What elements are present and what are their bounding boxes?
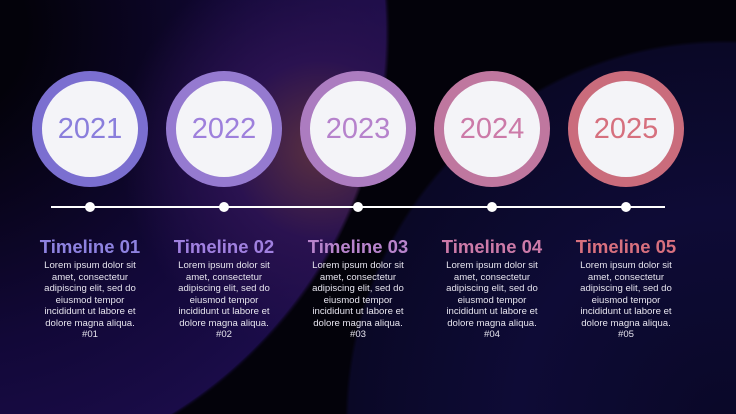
text 03: incididunt ut labore et xyxy=(312,306,404,317)
text 05: Timeline 05 xyxy=(576,236,676,257)
circle 2024 xyxy=(434,71,550,187)
circle 2021: 2021 xyxy=(58,113,122,145)
circle 2025 xyxy=(568,71,684,187)
text 01: dolore magna aliqua. xyxy=(45,318,135,328)
text 03 xyxy=(308,236,408,340)
text 01: amet, consectetur xyxy=(52,272,128,282)
text 02: eiusmod tempor xyxy=(190,294,258,306)
text 05: eiusmod tempor xyxy=(592,294,660,306)
text 03: Timeline 03 xyxy=(308,236,408,257)
text 03: Lorem ipsum dolor sit xyxy=(312,260,404,271)
text 05: adipiscing elit, sed do xyxy=(580,283,672,294)
circle 2021 xyxy=(32,71,148,187)
text 03: adipiscing elit, sed do xyxy=(312,283,404,294)
text 02: amet, consectetur xyxy=(186,272,262,282)
text 03: #03 xyxy=(350,329,366,340)
text 04: Lorem ipsum dolor sit xyxy=(446,260,538,271)
text 05 xyxy=(576,236,676,340)
text 05: #05 xyxy=(618,329,634,340)
text 02: dolore magna aliqua. xyxy=(179,318,269,328)
text 01: Timeline 01 xyxy=(40,236,140,257)
text 01: Lorem ipsum dolor sit xyxy=(44,260,136,271)
circle 2022: 2022 xyxy=(192,113,256,145)
text 04 xyxy=(442,236,542,340)
text 02: #02 xyxy=(216,329,232,340)
text 03: eiusmod tempor xyxy=(324,294,392,306)
text 02 xyxy=(174,236,274,340)
timeline line xyxy=(51,206,665,208)
circle 2025: 2025 xyxy=(594,113,658,145)
text 01: #01 xyxy=(82,329,98,340)
text 04: adipiscing elit, sed do xyxy=(446,283,538,294)
text 03: dolore magna aliqua. xyxy=(313,318,403,328)
text 01: incididunt ut labore et xyxy=(44,306,136,317)
circle 2022 xyxy=(166,71,282,187)
text 02: incididunt ut labore et xyxy=(178,306,270,317)
text 03: amet, consectetur xyxy=(320,272,396,282)
text 04: #04 xyxy=(484,329,500,340)
text 04: Timeline 04 xyxy=(442,236,542,257)
text 01: eiusmod tempor xyxy=(56,294,124,306)
text 05: dolore magna aliqua. xyxy=(581,318,671,328)
text 02: Lorem ipsum dolor sit xyxy=(178,260,270,271)
circle 2024: 2024 xyxy=(460,113,524,145)
text 01 xyxy=(40,236,140,340)
text 05: incididunt ut labore et xyxy=(580,306,672,317)
text 02: Timeline 02 xyxy=(174,236,274,257)
text 02: adipiscing elit, sed do xyxy=(178,283,270,294)
text 04: amet, consectetur xyxy=(454,272,530,282)
text 04: dolore magna aliqua. xyxy=(447,318,537,328)
circle 2023 xyxy=(300,71,416,187)
text 05: Lorem ipsum dolor sit xyxy=(580,260,672,271)
text 05: amet, consectetur xyxy=(588,272,664,282)
text 04: incididunt ut labore et xyxy=(446,306,538,317)
circle 2023: 2023 xyxy=(326,113,390,145)
dots xyxy=(85,202,631,212)
text 01: adipiscing elit, sed do xyxy=(44,283,136,294)
text 04: eiusmod tempor xyxy=(458,294,526,306)
